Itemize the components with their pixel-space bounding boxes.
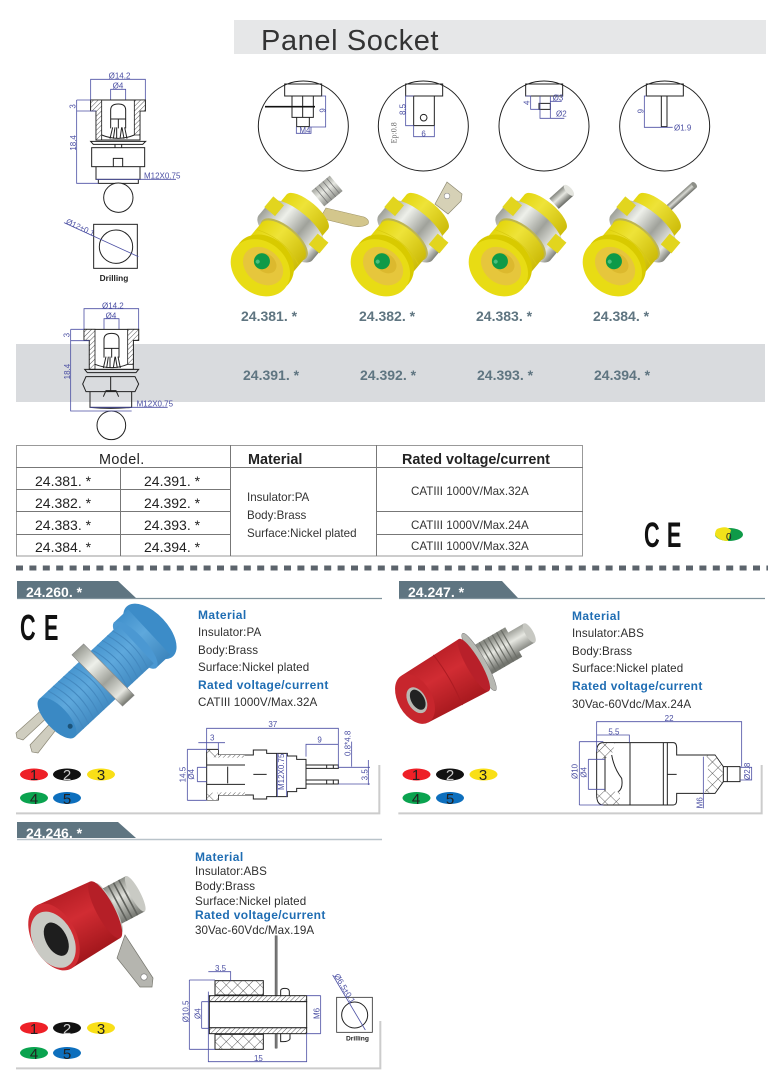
colour options: 24.247 (402, 767, 498, 808)
text block: 24.246 specification (195, 850, 326, 937)
specification table: 24.392. * (144, 495, 201, 511)
text block: 24.260 specification: Insulator:PA (198, 626, 261, 639)
technical drawing: 24.381 series socket section: 18.4 (69, 135, 78, 151)
colour options: 24.247: 3 (479, 767, 487, 784)
technical drawing: 24.260 dimensions: 3.5 (360, 769, 369, 780)
model codes row 2: 24.392. * (360, 367, 417, 383)
technical drawing: 24.247 dimensions: M6 (696, 797, 705, 808)
technical drawing: 24.391 series socket section: Ø14.2 (102, 302, 124, 311)
colour options: 24.246: 3 (97, 1021, 105, 1038)
text block: 24.260 specification: Material (198, 608, 247, 622)
technical drawing: 24.381 series socket section (68, 72, 181, 212)
specification table (16, 445, 583, 556)
icon: CE mark: CE (20, 608, 67, 648)
specification table: 24.391. * (144, 473, 201, 489)
technical drawing: 24.246 dimensions and drilling: 15 (254, 1054, 263, 1063)
colour options: 24.260: 3 (97, 767, 105, 784)
technical drawing: 24.247 dimensions: Ø10 (570, 763, 579, 779)
colour options: 24.247: 5 (446, 791, 454, 808)
photo: yellow socket 24.381 with solder lug (216, 176, 368, 311)
specification table: 24.383. * (35, 517, 92, 533)
text block: 24.260 specification: CATIII 1000V/Max.32A (198, 696, 317, 709)
technical drawing: 24.381 series socket section: M12X0.75 (144, 172, 181, 181)
technical drawing: 24.391 series socket section: Ø4 (106, 311, 117, 320)
model codes row 2: 24.393. * (477, 367, 534, 383)
detail circle: 24.381 terminal (258, 81, 348, 171)
technical drawing: 24.391 series socket section: M12X0.75 (137, 400, 174, 409)
text block: 24.247 specification: Insulator:ABS (572, 627, 644, 640)
specification table: CATIII 1000V/Max.32A (411, 540, 529, 553)
technical drawing: 24.381 series socket section: Ø4 (113, 82, 124, 91)
specification table: 24.393. * (144, 517, 201, 533)
technical drawing: drilling template (64, 217, 138, 283)
colour options: 24.260: 1 (30, 767, 38, 784)
section header: 24.247 (399, 581, 765, 600)
colour options: 24.247: 1 (412, 767, 420, 784)
technical drawing: 24.391 series socket section (62, 302, 174, 440)
text block: 24.260 specification: Surface:Nickel plated (198, 661, 309, 674)
section header: 24.247: 24.247. * (408, 584, 465, 600)
section header: 24.246 (17, 822, 382, 841)
detail circle: 24.382 blade terminal (378, 81, 468, 171)
detail circle: 24.382 blade terminal: Ep:0.8 (390, 122, 399, 143)
detail circle: 24.384 rod terminal (620, 81, 710, 171)
dashed divider (16, 566, 768, 570)
specification table: Model. (99, 452, 145, 468)
specification table: Insulator:PA (247, 491, 310, 504)
colour options: 24.260: 4 (30, 791, 38, 808)
detail circle: 24.382 blade terminal: 8.5 (398, 103, 407, 115)
text block: 24.246 specification: Surface:Nickel plated (195, 895, 306, 908)
photo: red socket 24.247 (384, 602, 549, 736)
technical drawing: 24.247 dimensions (398, 714, 762, 813)
colour options: 24.246 (20, 1021, 115, 1063)
technical drawing: 24.246 dimensions and drilling: Ø4 (194, 1008, 203, 1019)
technical drawing: 24.246 dimensions and drilling: 3.5 (215, 964, 227, 973)
specification table: Body:Brass (247, 509, 306, 522)
specification table: Material (248, 452, 302, 468)
colour options: 24.246: 5 (63, 1046, 71, 1063)
detail circle: 24.384 rod terminal: Ø1.9 (674, 124, 692, 133)
section header: 24.260 (17, 581, 382, 600)
specification table: 24.382. * (35, 495, 92, 511)
specification table: CATIII 1000V/Max.32A (411, 485, 529, 498)
technical drawing: 24.246 dimensions and drilling: Ø6.5±0.1 (332, 972, 357, 1005)
icon: CE mark: CE (644, 517, 689, 555)
detail circle: 24.384 rod terminal: 9 (636, 108, 645, 113)
technical drawing: 24.246 dimensions and drilling (16, 936, 380, 1068)
text block: 24.247 specification: Rated voltage/current (572, 679, 703, 693)
technical drawing: 24.260 dimensions: 0.8*4.8 (344, 730, 353, 756)
specification table: CATIII 1000V/Max.24A (411, 519, 529, 532)
text block: 24.260 specification (198, 608, 329, 709)
text block: 24.246 specification: Insulator:ABS (195, 865, 267, 878)
grey band behind second model row (16, 344, 765, 402)
colour options: 24.247: 2 (446, 767, 454, 784)
photo: yellow socket 24.382 with blade terminal (336, 181, 462, 311)
technical drawing: 24.246 dimensions and drilling: Ø10.5 (182, 1000, 191, 1022)
text block: 24.247 specification: Body:Brass (572, 645, 632, 658)
technical drawing: 24.381 series socket section: 3 (68, 104, 77, 109)
photo: red socket 24.246 with solder tab (18, 860, 157, 987)
specification table: Surface:Nickel plated (247, 527, 357, 540)
detail circle: 24.381 terminal: M4 (299, 126, 311, 135)
section header: 24.260: 24.260. * (26, 584, 83, 600)
technical drawing: 24.247 dimensions: 5.5 (608, 727, 620, 736)
colour options: 24.260 (20, 767, 115, 808)
technical drawing: 24.260 dimensions (16, 720, 379, 813)
technical drawing: 24.391 series socket section: 18.4 (63, 363, 72, 379)
technical drawing: 24.391 series socket section: 3 (62, 332, 71, 337)
technical drawing: 24.247 dimensions: Ø4 (580, 766, 589, 778)
photo: yellow socket 24.384 with long pin (568, 181, 698, 311)
text block: 24.247 specification: Material (572, 609, 621, 623)
specification table: 24.381. * (35, 473, 92, 489)
model codes row 1 (241, 308, 650, 324)
specification table: Rated voltage/current (402, 452, 550, 468)
text block: 24.246 specification: 30Vac-60Vdc/Max.19A (195, 924, 314, 937)
section header: 24.246: 24.246. * (26, 825, 83, 841)
detail circle: 24.383 pin terminal: Ø2 (556, 110, 567, 119)
technical drawing: 24.246 dimensions and drilling: M6 (312, 1007, 321, 1019)
photo: blue socket 24.260 (16, 593, 188, 753)
icon: earth colour badge: 0 (726, 532, 732, 543)
colour options: 24.260: 2 (63, 767, 71, 784)
technical drawing: 24.260 dimensions: M12X0.75 (277, 753, 286, 790)
technical drawing: 24.381 series socket section: Ø14.2 (109, 72, 131, 81)
title bar: Panel Socket: Panel Socket (261, 25, 439, 57)
model codes row 2: 24.391. * (243, 367, 300, 383)
text block: 24.247 specification: Surface:Nickel plated (572, 662, 683, 675)
photo: yellow socket 24.383 with solder pin (454, 181, 579, 311)
model codes row 2: 24.394. * (594, 367, 651, 383)
text block: 24.247 specification (572, 609, 703, 711)
specification table: 24.384. * (35, 539, 92, 555)
model codes row 1: 24.383. * (476, 308, 533, 324)
technical drawing: drilling template: Drilling (100, 273, 128, 283)
title bar: Panel Socket (234, 20, 766, 57)
detail circle: 24.381 terminal: 9 (318, 108, 327, 113)
text block: 24.247 specification: 30Vac-60Vdc/Max.24A (572, 698, 691, 711)
detail circle: 24.382 blade terminal: 6 (421, 129, 426, 138)
technical drawing: 24.247 dimensions: Ø2.8 (743, 762, 752, 780)
model codes row 1: 24.382. * (359, 308, 416, 324)
technical drawing: 24.260 dimensions: 9 (317, 735, 322, 744)
technical drawing: 24.260 dimensions: 14.5 (178, 766, 187, 782)
icon: earth colour badge (715, 527, 743, 543)
text block: 24.246 specification: Body:Brass (195, 880, 255, 893)
detail circle: 24.383 pin terminal (499, 81, 589, 171)
text block: 24.260 specification: Body:Brass (198, 644, 258, 657)
technical drawing: 24.260 dimensions: 37 (268, 720, 278, 729)
text block: 24.246 specification: Material (195, 850, 244, 864)
technical drawing: 24.246 dimensions and drilling: Drilling (346, 1036, 369, 1043)
model codes row 1: 24.381. * (241, 308, 298, 324)
technical drawing: 24.260 dimensions: 3 (210, 733, 215, 742)
detail circle: 24.383 pin terminal: Ø3 (553, 94, 564, 103)
colour options: 24.260: 5 (63, 791, 71, 808)
colour options: 24.246: 1 (30, 1021, 38, 1038)
specification table: 24.394. * (144, 539, 201, 555)
colour options: 24.246: 2 (63, 1021, 71, 1038)
technical drawing: 24.260 dimensions: Ø4 (187, 768, 196, 780)
technical drawing: drilling template: Ø12±0.1 (64, 217, 97, 238)
model codes row 1: 24.384. * (593, 308, 650, 324)
text block: 24.260 specification: Rated voltage/current (198, 678, 329, 692)
detail circle: 24.383 pin terminal: 4 (522, 100, 531, 105)
colour options: 24.246: 4 (30, 1046, 38, 1063)
text block: 24.246 specification: Rated voltage/current (195, 908, 326, 922)
colour options: 24.247: 4 (412, 791, 420, 808)
model codes row 2 (243, 367, 651, 383)
technical drawing: 24.247 dimensions: 22 (665, 714, 674, 723)
